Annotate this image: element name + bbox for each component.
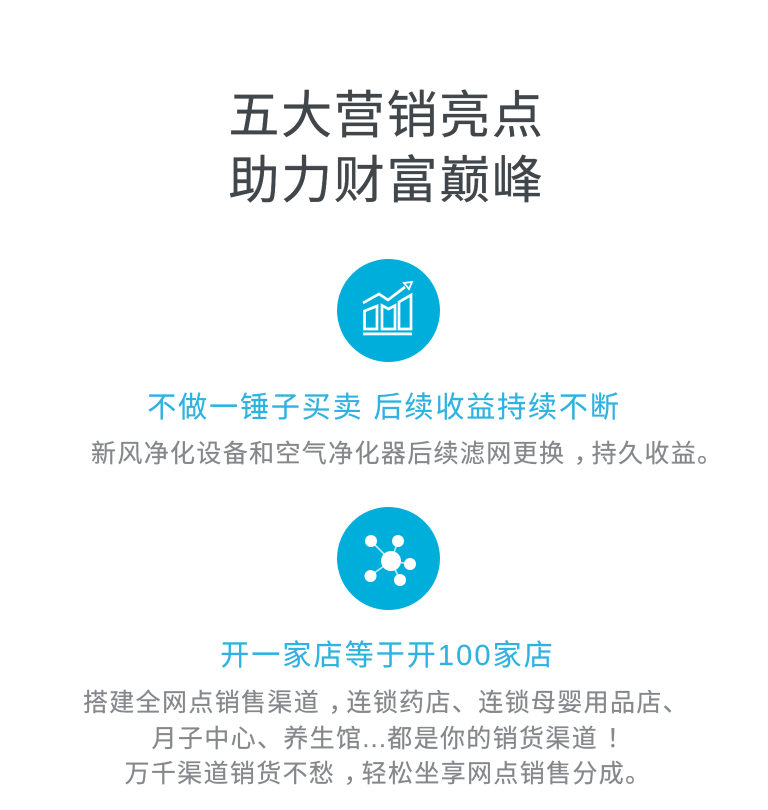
body text: second selling point: [83, 689, 689, 788]
title: 助力财富巅峰: [228, 152, 545, 209]
icon: network nodes: [337, 507, 440, 610]
subheading: first selling point: 不做一锤子买卖 后续收益持续不断: [147, 392, 621, 424]
body text: first selling point: 新风净化设备和空气净化器后续滤网更换 ，持久收益。: [91, 440, 723, 468]
title: [228, 87, 545, 209]
title: 五大营销亮点: [228, 87, 545, 144]
subheading: second selling point: 开一家店等于开100家店: [220, 640, 555, 672]
icon: rising bar chart: [337, 259, 440, 362]
body text: second selling point: 月子中心、养生馆...都是你的销货渠道 ！: [152, 725, 633, 753]
body text: second selling point: 搭建全网点销售渠道 ，连锁药店、连锁母婴用品店、: [83, 689, 689, 717]
body text: second selling point: 万千渠道销货不愁 ，轻松坐享网点销售分成。: [124, 760, 652, 788]
